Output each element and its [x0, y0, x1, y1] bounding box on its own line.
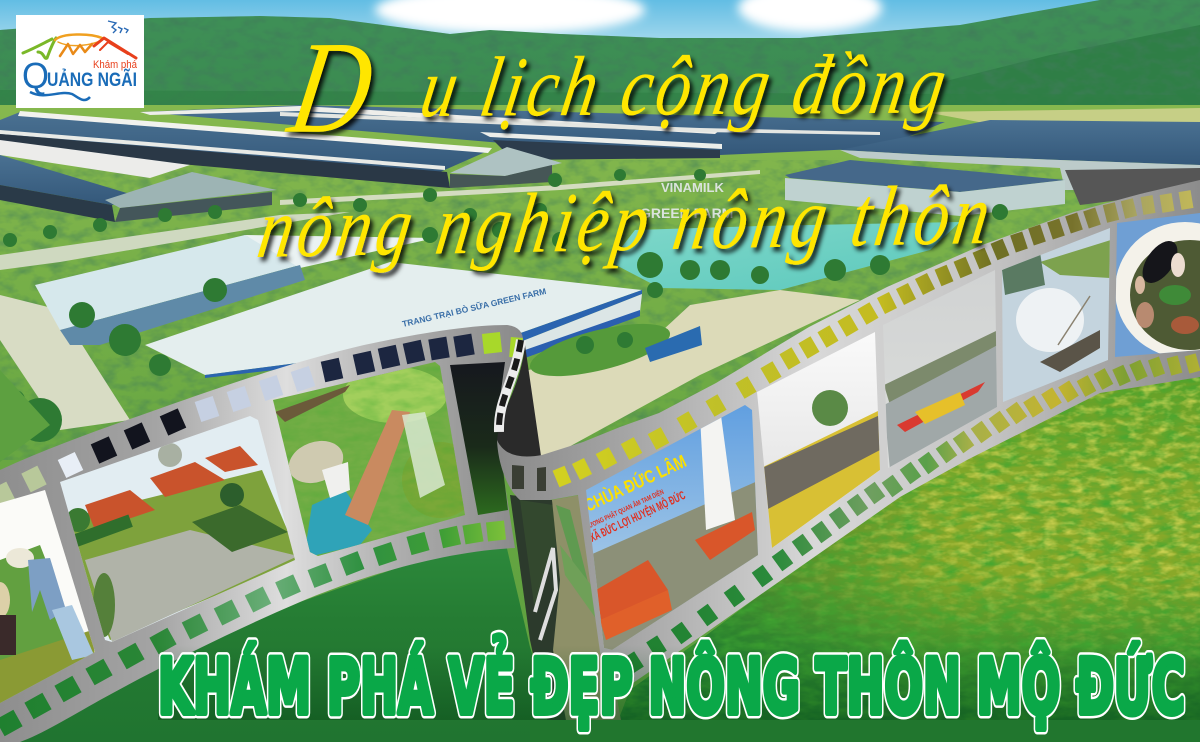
- frame: farmer bagging fruit: [273, 362, 465, 556]
- frame: garden with red roofs: [55, 410, 305, 645]
- logo text: Quảng Ngãi: Q: [22, 55, 49, 96]
- trees: [3, 169, 1008, 442]
- sprocket holes: top row: [556, 199, 1192, 479]
- logo: Khám phá Quảng Ngãi: [16, 15, 144, 108]
- green band under slogan: [530, 720, 1200, 742]
- film curl: [497, 340, 541, 462]
- sprocket holes: top row, dark: [95, 418, 182, 454]
- temple sign text: XÃ ĐỨC LỢI HUYỆN MỘ ĐỨC: [587, 487, 688, 545]
- sprocket holes: top row, dark: [512, 465, 546, 491]
- frame: Chùa Đức Lâm temple: [586, 405, 758, 650]
- temple sign text: [587, 454, 687, 542]
- sprocket holes: bottom row: [0, 530, 505, 728]
- film strip: left: [0, 325, 523, 742]
- barn: back long: [140, 105, 945, 160]
- frame: rice festival crowd: [757, 332, 880, 548]
- blue truck: [645, 326, 702, 362]
- far field strip: [925, 108, 1200, 126]
- sprocket holes: top row, navy: [323, 344, 473, 372]
- temple sign text: CHÙA ĐỨC LÂM: [581, 450, 689, 516]
- pond: [610, 222, 960, 290]
- curl shadow side: [497, 345, 541, 462]
- logo mountain: [23, 34, 136, 58]
- frame: farmers in field: [0, 488, 100, 705]
- title: Du lịch cộng đồng nông nghiệp nông thôn: nông nghiệp nông thôn: [252, 168, 997, 277]
- title: Du lịch cộng đồng nông nghiệp nông thôn: D: [279, 15, 387, 161]
- logo text: Quảng Ngãi: [22, 55, 137, 100]
- rice field: [620, 377, 1200, 720]
- sky: [0, 0, 1200, 60]
- frame: boat race: [885, 270, 997, 468]
- title: Du lịch cộng đồng nông nghiệp nông thôn: u lịch cộng đồng: [414, 38, 956, 136]
- sign: Vinamilk Green Farm: VINAMILK: [661, 180, 724, 195]
- slogan band shading: [158, 645, 1200, 720]
- frame: clam dish: [1112, 212, 1200, 362]
- logo text: Khám phá: Khám phá: [93, 59, 138, 71]
- white building: left: [35, 235, 435, 345]
- clouds: [375, 0, 882, 34]
- roof text: TRANG TRẠI BÒ SỮA GREEN FARM: [401, 285, 547, 329]
- title: Du lịch cộng đồng nông nghiệp nông thôn: [252, 11, 997, 277]
- sprocket holes: top row, green: [483, 342, 522, 348]
- sprocket holes: top row, checked cloth: [198, 376, 312, 412]
- logo text: Quảng Ngãi: UẢNG NGÃI: [47, 69, 137, 91]
- frame: river boat: [1000, 225, 1115, 405]
- frame: sugar cane: [552, 495, 625, 742]
- sprocket holes: top row, photo end: [0, 475, 42, 499]
- sprocket holes: bottom row: [628, 362, 1198, 666]
- curled film: dark lower section: [510, 495, 625, 742]
- green hills: [0, 0, 1200, 125]
- frame: dark photo by the curl: [450, 362, 508, 515]
- curl light edge: [499, 340, 521, 432]
- lawn island: [525, 313, 675, 387]
- barn: lower left: [0, 140, 277, 222]
- barn: long front: [0, 111, 562, 188]
- logo birds: [108, 21, 128, 33]
- green band bottom left: [0, 540, 560, 742]
- sign: Vinamilk Green Farm: GREEN FARM: [640, 205, 733, 221]
- sprocket holes: top row, white: [62, 461, 79, 469]
- pale road: [515, 290, 860, 465]
- curl dark perforations: [499, 340, 521, 432]
- barns: right: [785, 120, 1200, 216]
- white building: farm roof: [145, 262, 642, 378]
- film strip: right: [497, 180, 1200, 697]
- sign: Vinamilk Green Farm: [640, 180, 733, 221]
- temple sign text: ƯƠNG PHẬT QUAN ÂM TAM DIỆN: [587, 487, 665, 530]
